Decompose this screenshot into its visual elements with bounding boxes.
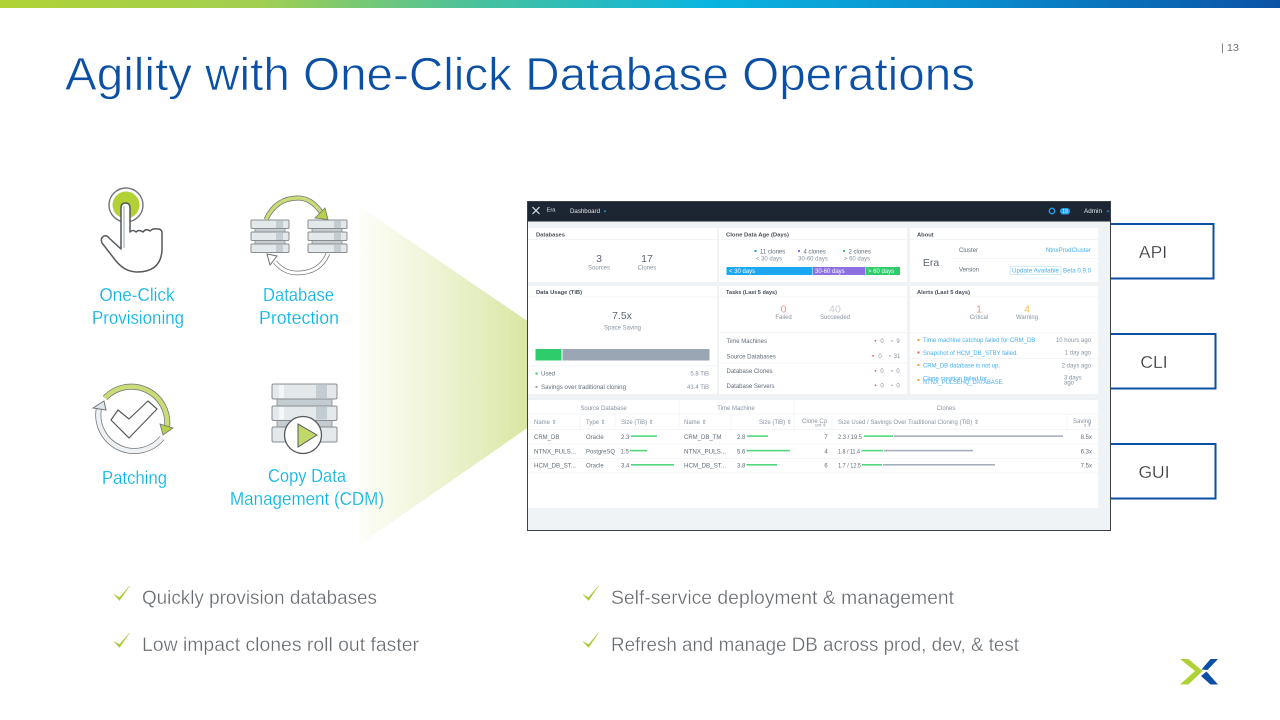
panel: about: Cluster (959, 248, 978, 254)
label: database protection: Protection (259, 308, 339, 328)
panel: tasks: Source Databases (726, 354, 776, 360)
panel: alerts: NTNX_PULSEHQ_DATABASE. (923, 380, 1004, 386)
panel: tasks: 0 (781, 304, 787, 316)
icon: database protection (251, 198, 347, 273)
panel: clone data age: 11 clones (760, 250, 785, 256)
table row: NTNX_PULS: NTNX_PULS... (684, 450, 726, 456)
table row: CRM_DB: CRM_DB_TM (684, 435, 721, 441)
panel: alerts: Alerts (Last 5 days) (917, 290, 970, 296)
dashboard header bar: Admin (1084, 209, 1102, 215)
bullet: refresh and manage: Refresh and manage DB across prod, dev, & test (611, 635, 1020, 656)
table row: NTNX_PULS: 1.8 / 11.4 (838, 450, 861, 456)
label: copy data management: Management (CDM) (230, 489, 384, 509)
box: API (1106, 224, 1214, 278)
panel: clone data age: Clone Data Age (Days) (726, 232, 789, 238)
panel: alerts: Warning (1016, 315, 1038, 321)
panel: alerts: 3 days (1064, 376, 1082, 382)
table row: NTNX_PULS: 1.5 (620, 450, 630, 456)
panel: databases: Databases (536, 232, 565, 238)
table row: CRM_DB: CRM_DB (534, 435, 559, 441)
icon: one-click hand (101, 188, 162, 272)
label: one-click provisioning (92, 285, 184, 328)
panel: data usage: 43.4 TiB (687, 385, 709, 391)
panel: tasks: 31 (894, 354, 901, 360)
table column headers: Size Used / Savings Over Traditional Cloning (TiB) ⇕ (838, 419, 979, 426)
label: one-click provisioning: One-Click (100, 285, 175, 305)
table row: HCM_DB_ST: 6 (824, 464, 828, 470)
table row: NTNX_PULS: 6.3x (1081, 450, 1092, 456)
panel: data usage: 5.8 TiB (690, 372, 709, 378)
panel: clone data age: < 30 days (756, 256, 782, 262)
panel: databases (528, 228, 717, 282)
panel: alerts: 1 (976, 304, 982, 316)
green spotlight triangle (359, 206, 605, 545)
panel: data usage: Space Saving (604, 326, 641, 332)
table row: CRM_DB (534, 435, 1092, 441)
panel: alerts: 4 (1024, 304, 1030, 316)
icon: patching (93, 387, 173, 451)
panel: databases: Clones (638, 266, 656, 272)
box: CLI (1106, 334, 1216, 388)
table column headers (534, 419, 1092, 428)
table row: HCM_DB_ST: Oracle (586, 464, 604, 470)
panel: tasks: 9 (896, 339, 900, 345)
box: GUI: GUI (1138, 462, 1170, 482)
panel: about: About (917, 232, 934, 238)
panel: alerts: Clone creation failed for (923, 376, 987, 382)
table row: HCM_DB_ST (534, 464, 1092, 470)
panel: tasks: Time Machines (726, 339, 767, 345)
panel: alerts: Critical (970, 315, 988, 321)
panel: clone data age: 2 clones (848, 250, 871, 256)
panel: data usage (528, 286, 717, 394)
panel: tasks: 0 (896, 384, 900, 390)
panel: clone data age (719, 228, 907, 282)
table row: CRM_DB: 2.3 / 19.5 (838, 435, 863, 441)
panel: clone data age: 30-60 days (798, 256, 828, 262)
table row: NTNX_PULS: 4 (824, 450, 828, 456)
table row: HCM_DB_ST: 3.8 (737, 464, 746, 470)
table column headers: Clone Co (802, 419, 828, 425)
box: GUI (1106, 444, 1216, 498)
panel: databases: 17 (641, 253, 653, 265)
box: API: API (1139, 242, 1167, 262)
panel: alerts (910, 286, 1098, 394)
panel: about: Era (923, 257, 939, 269)
bullet: self-service deployment: Self-service deployment & management (611, 588, 955, 609)
panel: tasks: 0 (880, 369, 884, 375)
panel: tasks: Database Clones (726, 369, 773, 375)
dashboard header bar: 19 (1062, 209, 1068, 215)
table column headers: Size (TiB) ⇕ (621, 419, 654, 426)
table group headers: Time Machine (717, 406, 755, 412)
table row: HCM_DB_ST: 7.5x (1081, 464, 1092, 470)
panel: tasks (719, 286, 907, 394)
panel: about: Update Available (1012, 268, 1060, 274)
panel: tasks: Failed (775, 315, 792, 321)
panel: data usage: Data Usage (TiB) (536, 290, 582, 296)
table column headers: Type ⇕ (586, 419, 606, 426)
panel: tasks: 40 (829, 304, 841, 316)
panel: clone data age: > 60 days (868, 269, 894, 275)
icon: nutanix logo (1180, 659, 1218, 684)
label: copy data management: Copy Data (268, 466, 347, 486)
table row: NTNX_PULS: PostgreSQ (586, 450, 615, 456)
label: database protection: Database (263, 285, 334, 305)
table row: NTNX_PULS: NTNX_PULS... (534, 450, 576, 456)
dashboard header bar: Era (546, 208, 556, 214)
table column headers: Name ⇕ (534, 419, 557, 426)
panel: clone data age: > 60 days (844, 256, 870, 262)
top gradient bar (0, 0, 1280, 8)
panel: about: Version (959, 268, 979, 274)
label: one-click provisioning: Provisioning (92, 308, 184, 328)
panel: tasks: Succeeded (820, 315, 850, 321)
panel: about: Beta 0.9.0 (1063, 268, 1092, 274)
table row: HCM_DB_ST: HCM_DB_ST... (534, 464, 576, 470)
panel: databases: 3 (596, 253, 602, 265)
table row: CRM_DB: 2.8 (737, 435, 746, 441)
panel: alerts: CRM_DB database is not up. (923, 364, 1000, 370)
page number: | 13 (1221, 43, 1239, 54)
bullet: quickly provision databases: Quickly provision databases (142, 588, 377, 609)
table group headers: Source Database (580, 406, 627, 412)
table row: NTNX_PULS (534, 450, 1092, 456)
panel: alerts: ago (1064, 380, 1075, 386)
panel: tasks: 0 (896, 369, 900, 375)
table row: NTNX_PULS: 5.6 (737, 450, 746, 456)
panel: databases: Sources (588, 266, 610, 272)
panel: alerts: Time machine catchup failed for CRM_DB. (923, 338, 1037, 344)
table group headers (580, 406, 955, 412)
panel: clone data age: < 30 days (729, 269, 755, 275)
panel: clone data age: 4 clones (804, 250, 826, 256)
table row: HCM_DB_ST: 3.4 (621, 464, 630, 470)
dashboard header bar: Dashboard (570, 209, 600, 215)
dashboard screenshot (528, 202, 1110, 530)
panel: tasks: 0 (880, 339, 884, 345)
table column headers: Name ⇕ (684, 419, 707, 426)
panel: about: NtnxProdCluster (1046, 248, 1091, 254)
label: copy data management (230, 466, 384, 509)
panel: data usage: 7.5x (612, 310, 633, 322)
icon: copy data management (272, 384, 337, 454)
panel: clone data age: 30-60 days (815, 269, 845, 275)
panel: tasks: Database Servers (726, 384, 775, 390)
label: patching: Patching (102, 468, 167, 488)
panel: about (910, 228, 1098, 282)
panel: data usage: Used (541, 372, 555, 378)
table row: CRM_DB: 7 (824, 435, 828, 441)
table row: CRM_DB: Oracle (586, 435, 604, 441)
panel: tasks: Tasks (Last 5 days) (726, 290, 777, 296)
panel: data usage: Savings over traditional cloning (541, 385, 626, 391)
table column headers: Size (TiB) ⇕ (759, 419, 792, 426)
panel: tasks: 0 (878, 354, 882, 360)
bullet: low impact clones: Low impact clones roll out faster (142, 635, 420, 656)
panel: alerts: 10 hours ago (1056, 338, 1092, 344)
label: database protection (259, 285, 339, 328)
title: Agility with One-Click Database Operations (65, 48, 975, 100)
table row: HCM_DB_ST: HCM_DB_ST... (684, 464, 726, 470)
table column headers: unt ⇕ (815, 422, 827, 428)
table row: CRM_DB: 2.3 (621, 435, 630, 441)
box: CLI: CLI (1140, 352, 1168, 372)
table group headers: Clones (937, 406, 955, 412)
panel: alerts: 1 day ago (1065, 350, 1092, 356)
table row: CRM_DB: 8.5x (1081, 435, 1092, 441)
table column headers: s ⇕ (1084, 422, 1092, 428)
table column headers: Saving (1073, 419, 1091, 425)
table row: HCM_DB_ST: 1.7 / 12.5 (838, 464, 862, 470)
panel: tasks: 0 (880, 384, 884, 390)
panel: alerts: 2 days ago (1062, 364, 1092, 370)
panel: alerts: Snapshot of HCM_DB_STBY failed. (923, 351, 1018, 357)
dashboard header bar (528, 202, 1110, 222)
panel: databases table (528, 400, 1098, 508)
